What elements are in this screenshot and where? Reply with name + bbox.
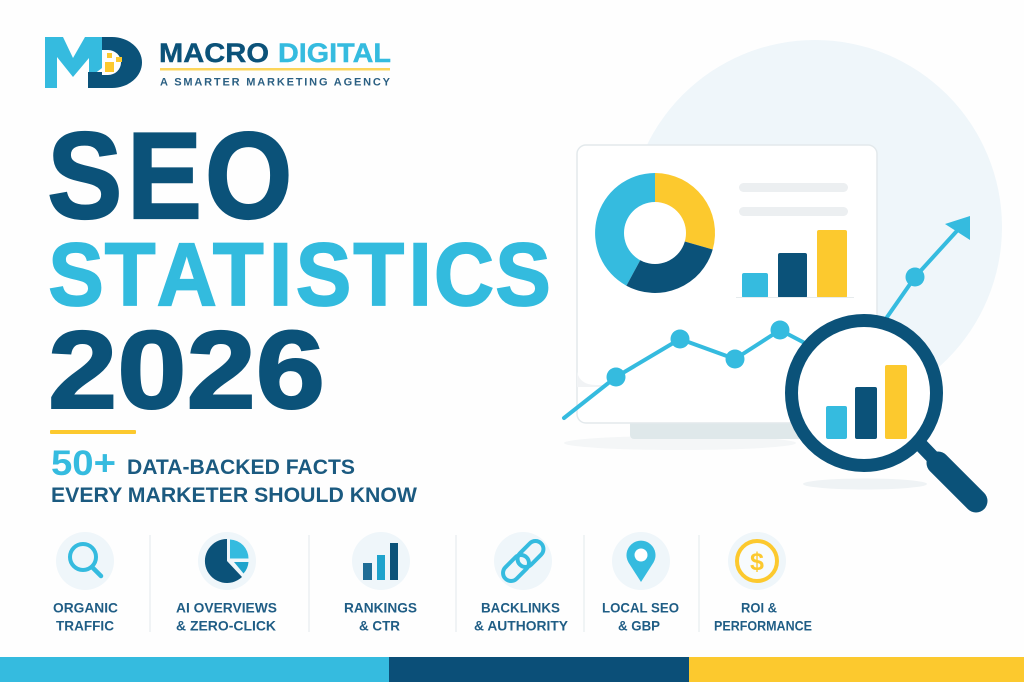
category: organic traffic [53, 532, 118, 634]
title [47, 106, 551, 432]
category: local SEO [602, 532, 679, 634]
category: ROI: PERFORMANCE [714, 618, 812, 634]
category: organic traffic: TRAFFIC [56, 618, 114, 634]
dashboard card [577, 145, 877, 423]
footer colour band [0, 657, 1024, 682]
logo tagline: A SMARTER MARKETING AGENCY [160, 76, 391, 88]
logo wordmark: DIGITAL: DIGITAL [278, 38, 391, 68]
monitor stand [630, 415, 820, 439]
subtitle line 2: EVERY MARKETER SHOULD KNOW [51, 483, 418, 507]
category: AI overviews: & ZERO-CLICK [176, 618, 276, 634]
card bar chart [736, 230, 854, 298]
accent rule [50, 430, 136, 434]
subtitle number: 50+: 50+ [51, 444, 116, 483]
category: ROI: $ [750, 548, 764, 576]
title line: 2026: 2026 [48, 309, 325, 432]
logo: Macro Digital [45, 37, 391, 88]
subtitle [51, 444, 418, 507]
title line: STATISTICS: STATISTICS [48, 225, 551, 325]
category: AI overviews [176, 532, 277, 634]
subtitle line 1: DATA-BACKED FACTS [127, 455, 355, 479]
magnified bar chart [826, 365, 907, 439]
hero illustration [564, 40, 1002, 501]
title line: SEO: SEO [47, 106, 292, 244]
category: ROI [714, 532, 812, 634]
trend line with arrow [564, 216, 970, 418]
category: rankings and CTR [344, 532, 417, 634]
category: AI overviews: AI OVERVIEWS [176, 600, 277, 616]
magnifying glass [792, 320, 976, 501]
background circle [628, 40, 1002, 414]
category: backlinks: BACKLINKS [481, 600, 560, 616]
category: rankings and CTR: & CTR [359, 618, 400, 634]
category: local SEO: LOCAL SEO [602, 600, 679, 616]
category row [53, 532, 812, 634]
category: backlinks [474, 532, 569, 634]
text placeholder lines [739, 183, 848, 216]
category: backlinks: & AUTHORITY [474, 618, 569, 634]
donut chart [595, 173, 715, 293]
category: ROI: ROI & [741, 600, 777, 616]
ground shadow [564, 436, 796, 450]
category: local SEO: & GBP [618, 618, 660, 634]
category: organic traffic: ORGANIC [53, 600, 118, 616]
logo wordmark: MACRO: MACRO [159, 38, 269, 68]
logo mark: MD monogram [45, 37, 142, 88]
magnifier shadow [803, 478, 927, 490]
category: rankings and CTR: RANKINGS [344, 600, 417, 616]
